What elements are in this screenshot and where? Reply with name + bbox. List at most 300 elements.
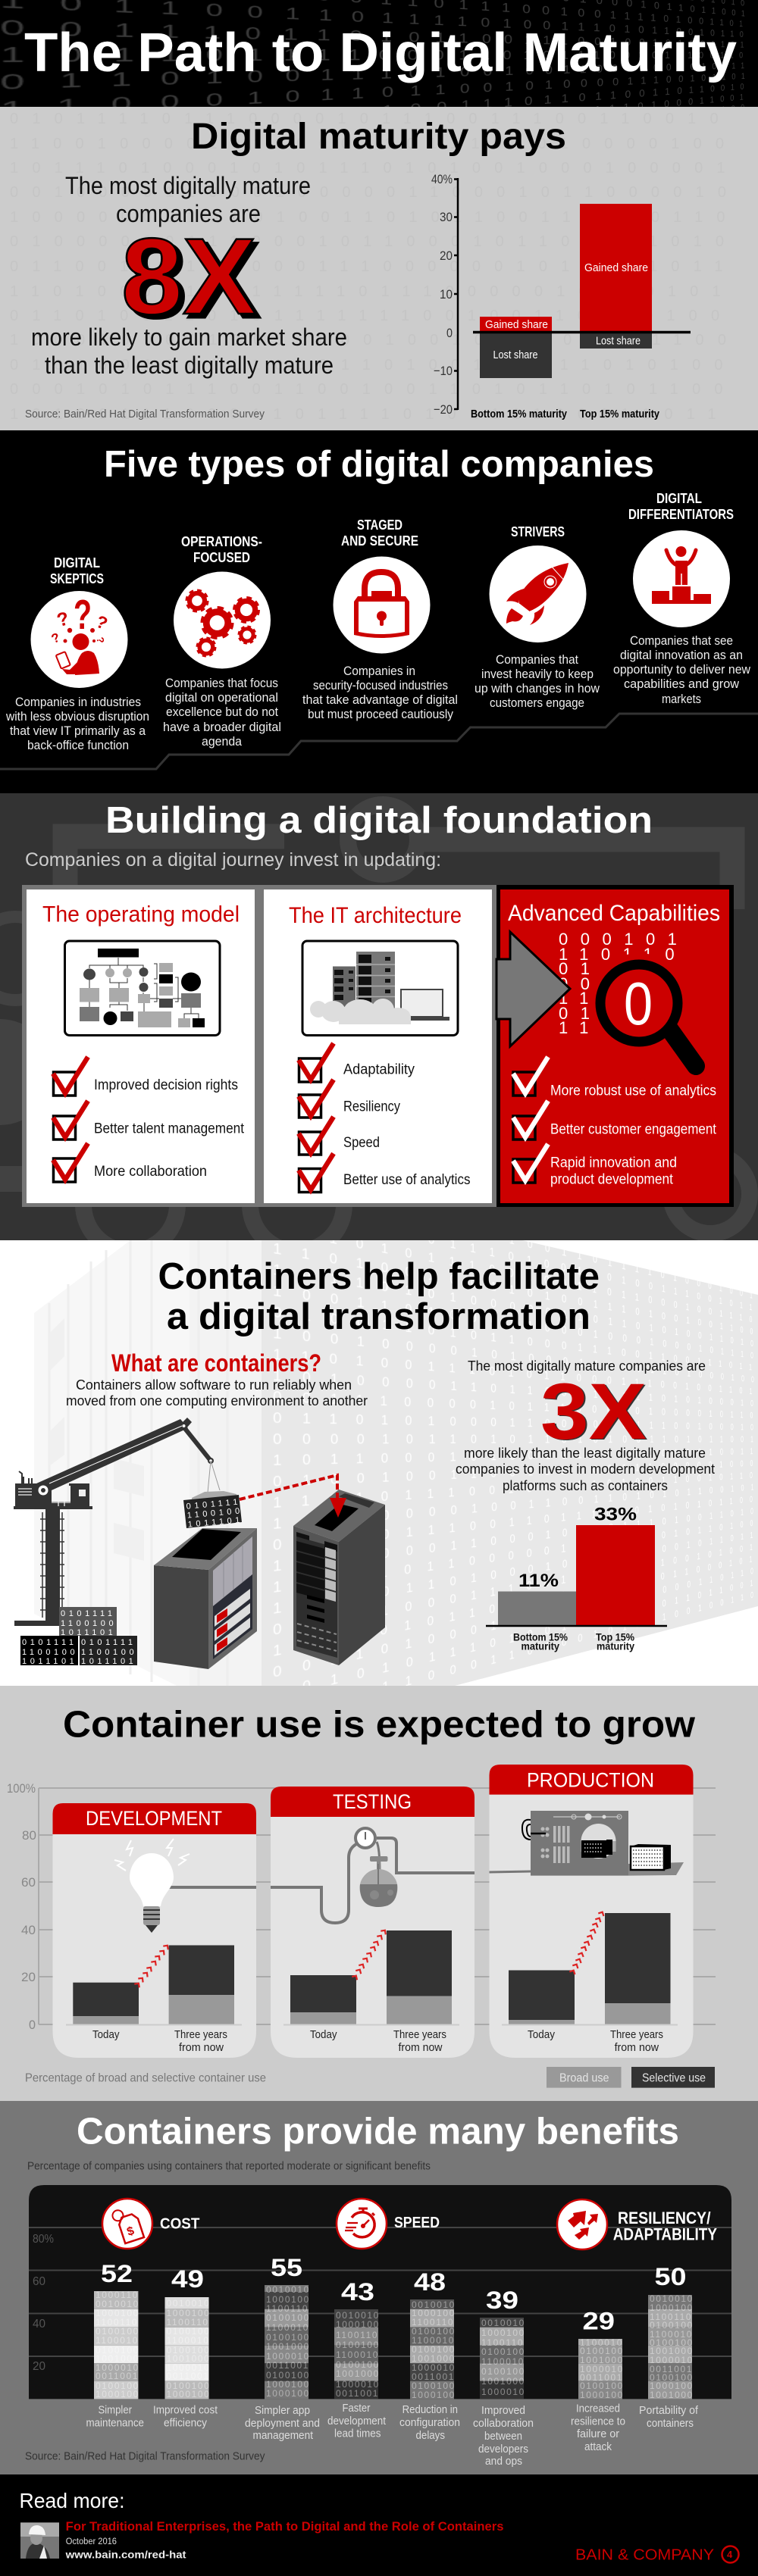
bar chart: 11% vs 33%: maturity bbox=[597, 1640, 634, 1652]
company type: digital skeptics: ? bbox=[55, 608, 71, 631]
bar chart: market share: Lost share bbox=[493, 349, 538, 361]
bar: 29: attack bbox=[584, 2440, 612, 2453]
bar: 49: 1000100 bbox=[167, 2308, 210, 2318]
heading: building a digital foundation: Building a digital foundation bbox=[105, 800, 653, 841]
illustration: open server bbox=[154, 1528, 257, 1669]
stacked containers: 0101111 bbox=[81, 1638, 136, 1647]
panel: digital maturity pays: 010111101110000101110011100110010 bbox=[10, 111, 732, 127]
panel: digital maturity pays: 101001110001101111010111100111011 bbox=[10, 406, 730, 423]
text block: more likely to gain market share: more likely to gain market share bbox=[31, 324, 347, 351]
bar: 50 bbox=[639, 2263, 699, 2430]
company type: staged and secure: but must proceed cautiously bbox=[308, 708, 454, 721]
checklist item: more robust use of analytics bbox=[513, 1057, 716, 1099]
bar chart: market share: 30 bbox=[440, 210, 453, 224]
bar: 29: 29 bbox=[582, 2307, 615, 2334]
stacked containers bbox=[20, 1607, 137, 1666]
panel: benefits chart bbox=[29, 2185, 731, 2468]
bar: 29: failure or bbox=[577, 2428, 619, 2440]
company type: digital differentiators: capabilities and grow bbox=[624, 677, 739, 691]
bar: 52: 1000100 bbox=[96, 2308, 139, 2318]
bar: 48: Reduction in bbox=[402, 2403, 458, 2416]
panel: benefits chart: 20 bbox=[33, 2360, 45, 2373]
card: testing bbox=[271, 1787, 475, 2058]
bar: 39: and ops bbox=[485, 2455, 522, 2468]
panel: benefits chart: 60 bbox=[33, 2275, 45, 2288]
company type: digital skeptics: ? bbox=[49, 630, 62, 646]
binary digits: 01 bbox=[559, 1004, 602, 1023]
company type: digital skeptics bbox=[5, 555, 149, 752]
company type: staged and secure: that take advantage of digital bbox=[302, 693, 458, 707]
bar: 48: 1100010 bbox=[412, 2335, 455, 2346]
bar: 52 bbox=[86, 2260, 144, 2429]
text block: 3X callout: more likely than the least digitally mature bbox=[464, 1446, 706, 1461]
company type: digital differentiators: Companies that see bbox=[630, 634, 733, 648]
bar: 43: 1001000 bbox=[336, 2368, 380, 2379]
category: cost: COST bbox=[160, 2215, 199, 2232]
bar: 39: 1100010 bbox=[481, 2356, 525, 2367]
bar chart: market share: Bottom 15% maturity bbox=[471, 408, 568, 420]
bar: 55 bbox=[245, 2254, 320, 2442]
bar: 50: 1100010 bbox=[650, 2329, 693, 2340]
bar: 48: 0010010 bbox=[412, 2299, 456, 2310]
checklist item: speed bbox=[299, 1117, 380, 1155]
company type: staged and secure: security-focused industries bbox=[313, 679, 448, 692]
bar: 43: 1000100 bbox=[336, 2319, 380, 2330]
text block: what are containers: What are containers? bbox=[111, 1349, 321, 1377]
checklist item: adaptability: Adaptability bbox=[343, 1062, 415, 1078]
text block: what are containers: moved from one computing environment to another bbox=[66, 1393, 368, 1408]
bar: 50: 1100110 bbox=[650, 2312, 692, 2322]
bar: 39: 1100110 bbox=[481, 2337, 524, 2348]
checklist item: rapid innovation and product development: product development bbox=[550, 1171, 674, 1188]
bar chart: 11% vs 33%: maturity bbox=[522, 1640, 559, 1652]
article link bbox=[65, 2520, 504, 2560]
heading: read more: Read more: bbox=[20, 2489, 124, 2512]
company type: operations-focused: OPERATIONS- bbox=[181, 533, 262, 549]
checklist item: rapid innovation and product development: Rapid innovation and bbox=[550, 1155, 677, 1171]
bar: 52: 0100100 bbox=[96, 2381, 139, 2391]
bar chart: market share: Gained share bbox=[485, 318, 548, 331]
binary digits: 000101 bbox=[559, 930, 689, 949]
checklist item: adaptability bbox=[299, 1043, 415, 1082]
category: speed bbox=[337, 2199, 440, 2249]
bar: 48: 1000100 bbox=[412, 2390, 456, 2400]
binary digits bbox=[559, 930, 689, 1037]
card: production: Three years bbox=[610, 2028, 663, 2041]
subheading: Percentage of companies using containers that reported moderate or significant benefits bbox=[27, 2160, 431, 2173]
binary digits: 11 bbox=[559, 989, 601, 1008]
bar: 49: 1000010 bbox=[167, 2362, 210, 2373]
bar chart: market share bbox=[431, 172, 691, 420]
bar: 50: 0100100 bbox=[650, 2320, 694, 2331]
bar: 52: maintenance bbox=[86, 2417, 144, 2429]
bar: 29: Increased bbox=[576, 2402, 620, 2415]
bar: 29: 1000100 bbox=[580, 2390, 624, 2400]
bar: 55: 0100100 bbox=[266, 2332, 310, 2343]
panel: digital maturity pays: 000101011100110010011010110101100 bbox=[10, 381, 737, 398]
title: The Path to Digital Maturity bbox=[24, 23, 737, 83]
bar: 43: 1100110 bbox=[336, 2330, 378, 2340]
stacked containers: 1100100 bbox=[61, 1619, 117, 1628]
stacked containers: 1100100 bbox=[22, 1648, 78, 1657]
bar: 52: 1000100 bbox=[96, 2389, 139, 2399]
callout: 8X: 8X bbox=[121, 217, 256, 337]
bar: 39: 0100100 bbox=[481, 2366, 525, 2377]
bar: 43: Faster bbox=[343, 2402, 370, 2415]
bar: 48 bbox=[399, 2268, 460, 2442]
heading: containers help facilitate a digital transformation: Containers help facilitate bbox=[158, 1256, 600, 1297]
icon: magnifying glass bbox=[589, 953, 696, 1066]
chart axis bbox=[7, 1781, 716, 2032]
stacked containers: 1011101 bbox=[61, 1628, 116, 1637]
panel: digital maturity pays bbox=[0, 107, 758, 430]
bar: 48: 1000010 bbox=[412, 2362, 456, 2373]
bar: 39: 0100100 bbox=[481, 2346, 525, 2357]
checklist item: better talent management bbox=[53, 1101, 245, 1140]
company type: digital differentiators: DIFFERENTIATORS bbox=[628, 506, 734, 522]
panel: digital maturity pays: 001000011000100000110001011000010 bbox=[10, 184, 740, 201]
text block: 3X callout bbox=[456, 1358, 715, 1493]
company type: strivers: up with changes in how bbox=[475, 682, 600, 696]
chart axis: 60 bbox=[21, 1875, 36, 1890]
bar: 52: 1000010 bbox=[96, 2362, 139, 2373]
bar: 39: Improved bbox=[481, 2404, 525, 2417]
bar: 29: resilience to bbox=[571, 2415, 625, 2428]
panel: the operating model: The operating model bbox=[42, 902, 240, 927]
company type: digital skeptics: ? bbox=[74, 591, 92, 638]
hanging container: 0101111 bbox=[186, 1497, 242, 1512]
panel: digital maturity pays: 101110100010101110101001000100001 bbox=[10, 160, 739, 177]
bar: 48: 1001000 bbox=[412, 2353, 456, 2364]
bar chart: market share: Gained share bbox=[584, 261, 648, 274]
chart axis: 0 bbox=[29, 2018, 36, 2032]
bar: 49: 0100100 bbox=[167, 2326, 210, 2337]
bar: 55: 1001000 bbox=[266, 2341, 310, 2352]
company type: strivers: Companies that bbox=[496, 653, 578, 667]
bar chart: market share: Lost share bbox=[596, 335, 641, 347]
bar: 29: 0100100 bbox=[580, 2381, 624, 2391]
logo: Bain & Company: BAIN & COMPANY bbox=[575, 2546, 714, 2563]
panel: the IT architecture bbox=[264, 889, 492, 1203]
stacked containers: 1011101 bbox=[22, 1657, 77, 1666]
bar: 49: 1000100 bbox=[167, 2389, 210, 2399]
bar: 48: 0100100 bbox=[412, 2381, 456, 2391]
category: speed: SPEED bbox=[394, 2215, 440, 2231]
checklist item: more collaboration: More collaboration bbox=[94, 1164, 207, 1180]
bar: 49: 0011001 bbox=[167, 2371, 210, 2381]
company type: staged and secure: Companies in bbox=[343, 664, 415, 678]
callout: 8X: 8X bbox=[126, 220, 261, 341]
bar: 49: 1001000 bbox=[167, 2353, 210, 2364]
company type: strivers: STRIVERS bbox=[511, 524, 565, 539]
company type: operations-focused: digital on operational bbox=[165, 691, 278, 705]
company type: digital skeptics: ? bbox=[94, 636, 107, 644]
checklist item: improved decision rights: Improved decision rights bbox=[94, 1077, 238, 1093]
category: resiliency/adaptability bbox=[557, 2199, 717, 2249]
checklist item: resiliency: Resiliency bbox=[343, 1099, 400, 1115]
bar: 49: 0100100 bbox=[167, 2381, 210, 2391]
card: development: Today bbox=[92, 2028, 120, 2041]
bar: 50: Portability of bbox=[639, 2404, 699, 2417]
bar: 55: Simpler app bbox=[255, 2404, 310, 2417]
panel: advanced capabilities: Advanced Capabilities bbox=[508, 901, 720, 926]
bar: 39: 39 bbox=[486, 2287, 518, 2314]
bar: 43 bbox=[327, 2278, 387, 2440]
company type: digital differentiators: opportunity to deliver new bbox=[613, 663, 750, 677]
bar chart: 11% vs 33%: 11% bbox=[518, 1571, 559, 1591]
chart axis: 100% bbox=[7, 1781, 36, 1796]
bar: 43: 1000010 bbox=[336, 2379, 380, 2390]
panel: benefits chart: 40 bbox=[33, 2318, 45, 2331]
bar: 55: 55 bbox=[271, 2254, 302, 2281]
heading: containers help facilitate a digital transformation bbox=[158, 1256, 600, 1337]
bar: 55: 0010010 bbox=[266, 2284, 310, 2295]
heading: digital maturity pays: Digital maturity pays bbox=[191, 117, 566, 157]
company type: digital skeptics: back-office function bbox=[27, 739, 129, 752]
category: cost bbox=[102, 2199, 199, 2249]
bar: 52: 1100010 bbox=[96, 2335, 139, 2346]
bar: 55: 1000100 bbox=[266, 2388, 310, 2399]
text block: most digitally mature bbox=[65, 172, 311, 227]
chart axis: 80 bbox=[22, 1828, 36, 1843]
chart axis: 20 bbox=[21, 1970, 36, 1984]
text block: what are containers: Containers allow software to run reliably when bbox=[76, 1377, 352, 1393]
panel: digital maturity pays: 110010000101100011011101010000100 bbox=[10, 136, 738, 152]
photo: engineer in hard hat bbox=[20, 2522, 59, 2559]
bar: 39: 1000100 bbox=[481, 2327, 525, 2338]
binary digits: 11 bbox=[559, 1018, 601, 1037]
text block: what are containers bbox=[66, 1349, 368, 1408]
card: testing: Three years bbox=[393, 2028, 446, 2041]
bar: 48: 1100110 bbox=[412, 2317, 454, 2327]
bar chart: market share: 20 bbox=[440, 249, 453, 263]
card: development: Three years bbox=[174, 2028, 227, 2041]
card: testing: Today bbox=[310, 2028, 337, 2041]
bar: 43: 1100010 bbox=[336, 2349, 379, 2360]
checklist item: better customer engagement: Better customer engagement bbox=[550, 1122, 717, 1138]
card: testing: from now bbox=[399, 2041, 443, 2054]
text block: 3X callout: companies to invest in modern development bbox=[456, 1462, 715, 1477]
bar: 55: 1000100 bbox=[266, 2379, 310, 2390]
text block: 3X callout: 3X bbox=[542, 1368, 648, 1457]
bar: 43: 0011001 bbox=[336, 2388, 379, 2399]
chart axis: 40 bbox=[21, 1923, 36, 1937]
bar: 43: 0100100 bbox=[336, 2359, 380, 2370]
panel: building a digital foundation bbox=[0, 793, 758, 1240]
bar: 29: 1100010 bbox=[580, 2337, 623, 2348]
panel: benefits chart: 80% bbox=[33, 2233, 54, 2246]
checklist item: speed: Speed bbox=[343, 1135, 380, 1151]
bar: 48: 0011001 bbox=[412, 2371, 455, 2382]
bar: 52: 0100100 bbox=[96, 2326, 139, 2337]
panel: the operating model bbox=[22, 885, 496, 1207]
arrow bbox=[496, 932, 570, 1046]
text block: 3X callout: platforms such as containers bbox=[503, 1478, 668, 1493]
bar: 55: 0011001 bbox=[266, 2360, 309, 2371]
bar: 55: 1000100 bbox=[266, 2294, 310, 2305]
bar: 29 bbox=[571, 2307, 625, 2453]
company type: operations-focused: have a broader digital bbox=[163, 721, 281, 734]
bar: 39: collaboration bbox=[473, 2417, 534, 2430]
logo: Bain & Company: 4 bbox=[727, 2549, 733, 2560]
bar: 48: configuration bbox=[399, 2416, 460, 2429]
hanging container: 1011101 bbox=[187, 1515, 244, 1530]
card: production: Today bbox=[528, 2028, 555, 2041]
bar: 52: 0010010 bbox=[96, 2299, 139, 2309]
bar: 43: 43 bbox=[341, 2278, 374, 2306]
article link: October 2016 bbox=[66, 2537, 117, 2546]
binary digits: 01 bbox=[559, 959, 602, 978]
card: testing: TESTING bbox=[333, 1790, 412, 1813]
category: resiliency/adaptability: RESILIENCY/ bbox=[618, 2209, 711, 2227]
checklist item: better customer engagement bbox=[513, 1101, 717, 1140]
icon: production machine bbox=[490, 1811, 684, 1876]
panel: footer read more bbox=[0, 2474, 758, 2576]
panel: digital maturity pays: 110100001101111101110000010100101 bbox=[10, 283, 735, 300]
company type: digital skeptics: with less obvious disruption bbox=[5, 710, 149, 724]
category: resiliency/adaptability: ADAPTABILITY bbox=[613, 2225, 717, 2244]
bar: 49: 49 bbox=[171, 2265, 204, 2293]
text block: 3X callout: The most digitally mature companies are bbox=[468, 1358, 706, 1374]
company type: digital skeptics: Companies in industries bbox=[15, 696, 141, 709]
subheading: Companies on a digital journey invest in updating: bbox=[25, 849, 441, 871]
company type: digital skeptics: ? bbox=[93, 611, 111, 633]
bar: 50: 1000010 bbox=[650, 2355, 694, 2365]
article link: For Traditional Enterprises, the Path to Digital and the Role of Containers bbox=[66, 2520, 504, 2534]
checklist item: better talent management: Better talent management bbox=[94, 1121, 245, 1136]
checklist item: better use of analytics bbox=[299, 1153, 470, 1193]
bar: 50: 0010010 bbox=[650, 2293, 694, 2304]
panel: container use is expected to grow bbox=[0, 1686, 758, 2101]
company type: digital differentiators: DIGITAL bbox=[656, 490, 702, 506]
card: development bbox=[53, 1803, 256, 2058]
bar: 43: development bbox=[327, 2415, 387, 2428]
bar: 52: 1000110 bbox=[96, 2290, 139, 2300]
company type: staged and secure: AND SECURE bbox=[341, 533, 418, 549]
card: development: DEVELOPMENT bbox=[86, 1807, 222, 1830]
stacked containers: 1011101 bbox=[81, 1657, 136, 1666]
checklist item: rapid innovation and product development bbox=[513, 1144, 677, 1188]
bar: 39: 1001000 bbox=[481, 2376, 525, 2387]
bar: 29: 0100100 bbox=[580, 2346, 624, 2356]
binary digits: 00 bbox=[559, 974, 602, 993]
panel: digital maturity pays: 100000001000100110101100110100110 bbox=[10, 209, 739, 226]
company type: operations-focused: Companies that focus bbox=[165, 677, 278, 690]
text block: 3X callout: 3X bbox=[540, 1368, 647, 1456]
bar: 49: 1100110 bbox=[167, 2317, 209, 2327]
panel: five types of digital companies bbox=[0, 430, 758, 793]
bar: 39: 0010010 bbox=[481, 2318, 525, 2328]
bar chart: market share: 10 bbox=[440, 287, 453, 302]
bar: 39: 1000010 bbox=[481, 2387, 525, 2397]
bar chart: 11% vs 33%: Top 15% bbox=[596, 1630, 634, 1643]
bar: 49: 0100100 bbox=[167, 2345, 210, 2356]
source note: Source: Bain/Red Hat Digital Transformation Survey bbox=[25, 408, 265, 420]
bar chart: market share: −10 bbox=[434, 364, 453, 378]
text block: more likely to gain market share bbox=[31, 324, 347, 379]
text block: most digitally mature: The most digitally mature bbox=[65, 172, 311, 199]
bar: 55: 0100100 bbox=[266, 2370, 310, 2381]
bar: 48: 1000100 bbox=[412, 2308, 456, 2318]
heading: containers help facilitate a digital transformation: a digital transformation bbox=[167, 1296, 590, 1337]
panel: containers provide many benefits bbox=[0, 2101, 758, 2474]
bar chart: market share: −20 bbox=[434, 402, 453, 417]
bar: 50: 1000100 bbox=[650, 2302, 694, 2313]
company type: operations-focused: excellence but do not bbox=[166, 705, 278, 719]
bar: 55: 1000010 bbox=[266, 2351, 310, 2362]
bar: 50: 1001000 bbox=[650, 2346, 694, 2356]
icon: flask and gauge bbox=[271, 1828, 475, 1923]
stacked containers: 0101111 bbox=[22, 1638, 77, 1647]
chart note: Percentage of broad and selective container use bbox=[25, 2071, 266, 2085]
bar: 52: 1100110 bbox=[96, 2317, 138, 2327]
bar: 29: 1001000 bbox=[580, 2355, 624, 2365]
source note: Source: Bain/Red Hat Digital Transformation Survey bbox=[25, 2450, 265, 2463]
icon: light bulb bbox=[114, 1839, 256, 1933]
company type: operations-focused: FOCUSED bbox=[193, 549, 250, 565]
legend: Selective use bbox=[642, 2071, 706, 2085]
illustration: crane with containers bbox=[14, 1418, 244, 1666]
company type: strivers: customers engage bbox=[490, 696, 584, 710]
checklist item: more collaboration bbox=[53, 1143, 207, 1182]
bar chart: market share: 40% bbox=[431, 172, 453, 186]
bar: 48: delays bbox=[415, 2429, 445, 2442]
bar: 29: 1000010 bbox=[580, 2364, 624, 2374]
panel: advanced capabilities bbox=[496, 885, 734, 1207]
company type: operations-focused: agenda bbox=[202, 735, 243, 749]
bar: 52: 0011001 bbox=[96, 2371, 139, 2381]
icon: magnifying glass: 0 bbox=[624, 970, 653, 1037]
company type: staged and secure: STAGED bbox=[357, 517, 402, 533]
card: production: PRODUCTION bbox=[527, 1768, 654, 1791]
hanging container bbox=[183, 1491, 244, 1530]
bar: 49: Improved cost bbox=[153, 2404, 218, 2417]
binary digits: 110110 bbox=[559, 945, 687, 964]
bar: 52: 0100100 bbox=[96, 2345, 139, 2356]
bar: 55: deployment and bbox=[245, 2417, 320, 2430]
company type: staged and secure bbox=[302, 517, 458, 721]
bar chart: market share: 0 bbox=[446, 326, 453, 340]
bar: 55: management bbox=[253, 2429, 314, 2442]
legend bbox=[547, 2067, 715, 2088]
panel: the IT architecture: The IT architecture bbox=[289, 903, 462, 928]
stacked containers: 0101111 bbox=[61, 1609, 116, 1618]
bar: 50: containers bbox=[647, 2417, 694, 2430]
bar: 49 bbox=[153, 2265, 218, 2429]
bar: 50: 0100100 bbox=[650, 2337, 694, 2348]
text block: more likely to gain market share: than the least digitally mature bbox=[45, 352, 334, 379]
server and cloud illustration bbox=[302, 941, 458, 1035]
checklist item: more robust use of analytics: More robust use of analytics bbox=[550, 1083, 716, 1099]
bar: 43: 0100100 bbox=[336, 2340, 380, 2350]
bar: 49: 0010010 bbox=[167, 2298, 210, 2309]
bar: 49: 1100010 bbox=[167, 2335, 210, 2346]
bar: 55: 1100110 bbox=[266, 2303, 309, 2314]
company type: digital differentiators bbox=[613, 490, 750, 706]
checklist item: better use of analytics: Better use of analytics bbox=[343, 1172, 470, 1188]
bar: 39: developers bbox=[478, 2443, 528, 2456]
org chart illustration bbox=[65, 941, 220, 1035]
panel: digital maturity pays: 011010011010111111100100110000100 bbox=[10, 308, 733, 324]
heading: containers provide many benefits: Containers provide many benefits bbox=[77, 2111, 679, 2152]
article link: www.bain.com/red-hat bbox=[65, 2548, 186, 2560]
bar: 43: lead times bbox=[334, 2428, 381, 2440]
panel: digital maturity pays: 010000001110001011000101100011010 bbox=[10, 233, 738, 250]
bar chart: 11% vs 33%: Bottom 15% bbox=[513, 1630, 568, 1643]
bar: 49: efficiency bbox=[164, 2417, 207, 2429]
panel: digital maturity pays: 100010001100110001001000100101100 bbox=[10, 332, 740, 349]
bar: 39: between bbox=[484, 2430, 522, 2443]
